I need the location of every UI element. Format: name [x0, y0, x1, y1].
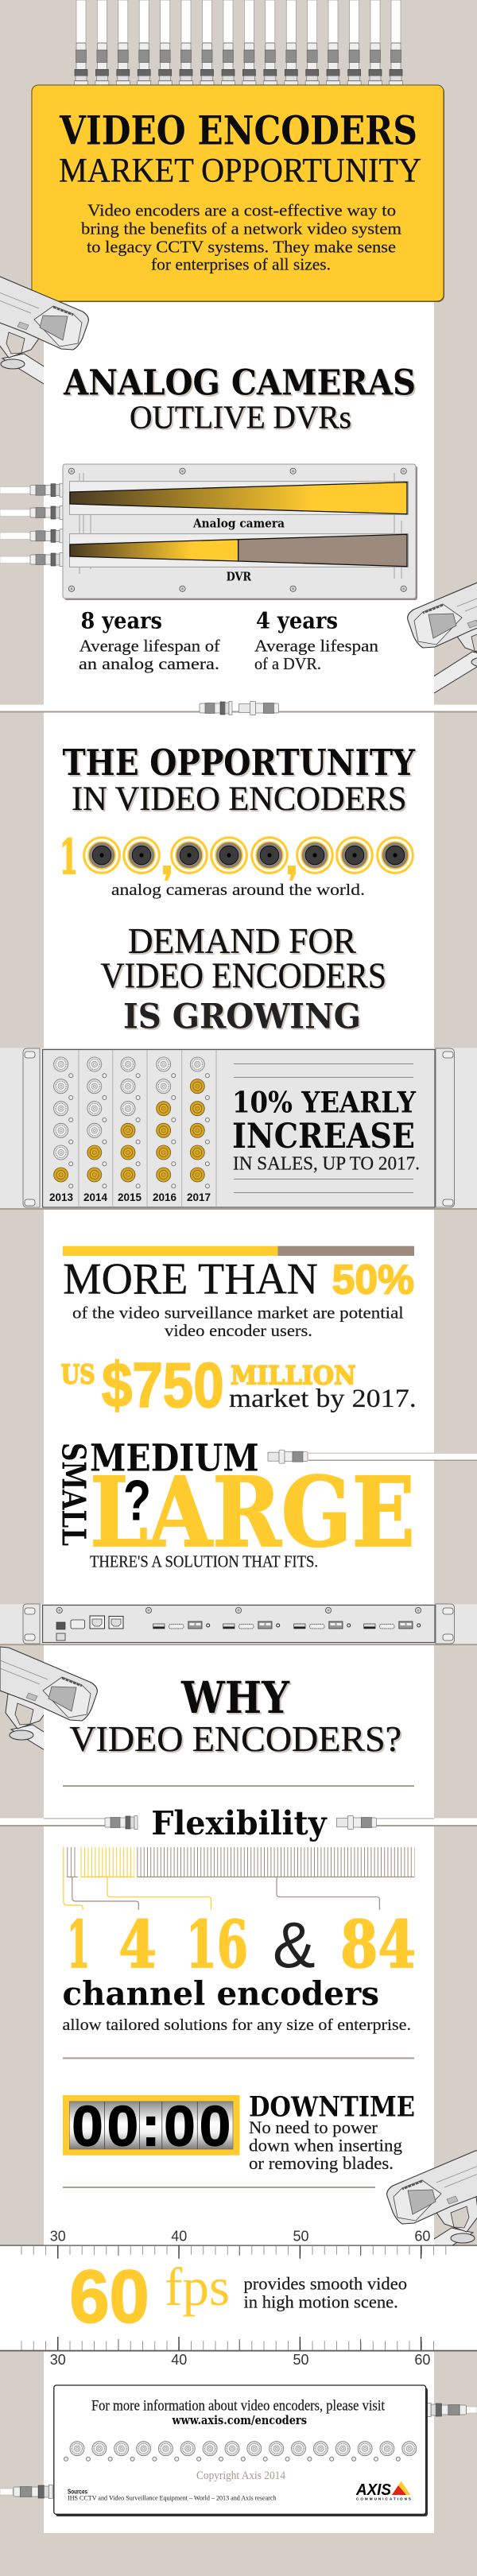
- sources: Sources: [68, 2488, 87, 2496]
- numbers: channel counts: 4: [118, 1908, 157, 1983]
- stat: 8 years: 8 years: [81, 608, 162, 634]
- panel: title: [32, 85, 444, 302]
- cable joint divider: [0, 701, 477, 715]
- callout: yearly increase: [232, 1086, 420, 1175]
- column: 2015: [118, 1057, 142, 1203]
- text: potential users: [72, 1303, 404, 1340]
- numbers: channel counts: [67, 1908, 416, 1983]
- icon: camera top left: [0, 277, 89, 385]
- intro text: Video encoders are a cost-effective way to: [87, 201, 396, 220]
- title: VIDEO ENCODERS: [59, 107, 417, 154]
- panel: rack sales chart: [0, 1048, 477, 1210]
- callout: yearly increase: INCREASE: [232, 1117, 415, 1156]
- number: 100,000,000 with lens zeros: 1: [60, 830, 78, 885]
- text: smooth video: provides smooth video: [243, 2274, 407, 2294]
- text: downtime: or removing blades.: [249, 2153, 394, 2173]
- heading: demand for video encoders is growing: [100, 921, 386, 1036]
- stat: 4 years: Average lifespan: [254, 636, 379, 655]
- section: flexibility header with cable: [0, 1804, 477, 1842]
- stat: US $750 million: $750: [102, 1350, 224, 1420]
- heading: more than 50%: MORE THAN: [63, 1254, 318, 1303]
- callout: yearly increase: 10% YEARLY: [232, 1086, 417, 1119]
- cable: medium plug: [268, 1450, 477, 1463]
- chart band: DVR: [69, 534, 408, 567]
- text: small medium large: LARGE: [90, 1455, 415, 1569]
- heading: demand for video encoders is growing: DEMAND FOR: [128, 921, 356, 961]
- ruler labels top: 60: [414, 2228, 430, 2244]
- column: 2014: 2014: [83, 1191, 107, 1203]
- heading: flexibility: Flexibility: [151, 1804, 328, 1842]
- stat: US $750 million: market by 2017.: [229, 1385, 417, 1413]
- text: channel encoders: channel encoders: [62, 1975, 379, 2013]
- icon: camera right upper: [407, 582, 477, 694]
- ruler labels bottom: 60: [414, 2352, 430, 2368]
- subheading: outlive DVRs: OUTLIVE DVRs: [130, 399, 351, 436]
- progress bar: 50 percent: [63, 1246, 414, 1256]
- text: small medium large: MEDIUM: [90, 1437, 259, 1481]
- intro text: to legacy CCTV systems. They make sense: [87, 237, 396, 256]
- stat: 8 years: Average lifespan of: [80, 636, 220, 655]
- text: smooth video: [243, 2274, 407, 2311]
- numbers: channel counts: 16: [186, 1908, 248, 1983]
- sources: IHS CCTV and Video Surveillance Equipment – World – 2013 and Axis research: [68, 2493, 277, 2501]
- intro text: [81, 201, 401, 273]
- stat: 8 years: an analog camera.: [79, 654, 219, 673]
- stat: US $750 million: [61, 1350, 417, 1420]
- column: 2016: 2016: [153, 1191, 176, 1203]
- stat: 8 years: [79, 608, 220, 673]
- timer: 00:00: 00:00: [72, 2095, 231, 2159]
- panel: footer: [54, 2385, 428, 2516]
- heading: more than 50%: 50%: [332, 1257, 414, 1303]
- stat: 60 fps: 60: [69, 2255, 149, 2338]
- ruler labels top: 30: [50, 2228, 66, 2244]
- text: smooth video: in high motion scene.: [243, 2291, 398, 2311]
- numbers: channel counts: 1: [67, 1908, 90, 1983]
- caption: analog cameras: analog cameras around the world.: [111, 881, 365, 899]
- callout: yearly increase: IN SALES, UP TO 2017.: [233, 1154, 420, 1175]
- column: 2017: [187, 1057, 211, 1203]
- icon: camera left middle: [0, 1647, 98, 1750]
- connectors: footer cables: [0, 2404, 477, 2499]
- text: tailored solutions: allow tailored solutions for any size of enterprise.: [62, 2016, 411, 2034]
- column: 2015: 2015: [118, 1191, 142, 1203]
- ruler labels top: 40: [171, 2228, 187, 2244]
- numbers: channel counts: &: [273, 1909, 316, 1981]
- ruler labels bottom: [50, 2352, 430, 2368]
- icon: camera right lower: [386, 2150, 477, 2245]
- stat: US $750 million: US: [61, 1359, 95, 1390]
- caption: solution that fits: THERE'S A SOLUTION THAT FITS.: [90, 1552, 318, 1571]
- ruler labels bottom: 30: [50, 2352, 66, 2368]
- heading: demand for video encoders is growing: IS GROWING: [123, 997, 361, 1036]
- text: potential users: video encoder users.: [165, 1321, 312, 1340]
- number: 100,000,000 with lens zeros: [60, 830, 413, 885]
- stat: 4 years: of a DVR.: [254, 654, 321, 673]
- text: downtime: DOWNTIME: [249, 2091, 415, 2124]
- column: 2013: [49, 1057, 73, 1203]
- text: small medium large: ?: [123, 1470, 151, 1533]
- connectors: DVR panel inputs: [0, 483, 63, 566]
- column: 2017: 2017: [187, 1191, 211, 1203]
- top coax cables: [75, 0, 402, 85]
- stat: US $750 million: MILLION: [231, 1361, 356, 1391]
- subtitle: MARKET OPPORTUNITY: [59, 153, 421, 190]
- logo: Axis Communications: [355, 2481, 411, 2500]
- diagram: channel comb: [64, 1847, 415, 1910]
- ruler: frame rate: [0, 2228, 477, 2368]
- heading: why: WHY: [180, 1671, 290, 1723]
- logo: Axis Communications: COMMUNICATIONS: [356, 2497, 411, 2500]
- text: downtime: down when inserting: [249, 2136, 402, 2156]
- label: DVR: DVR: [227, 571, 252, 584]
- intro text: bring the benefits of a network video system: [81, 219, 401, 238]
- stat: 4 years: [254, 608, 379, 673]
- stat: 4 years: 4 years: [256, 608, 338, 634]
- label: analog camera: Analog camera: [192, 517, 285, 530]
- ruler labels bottom: 50: [293, 2352, 309, 2368]
- white content column: [44, 298, 434, 2533]
- heading: the opportunity: THE OPPORTUNITY: [62, 742, 416, 784]
- connector faces row: [64, 2442, 417, 2461]
- intro text: for enterprises of all sizes.: [151, 254, 331, 273]
- text: downtime: No need to power: [249, 2117, 378, 2137]
- heading: analog cameras: ANALOG CAMERAS: [63, 363, 416, 404]
- numbers: channel counts: 84: [340, 1908, 416, 1983]
- link text: www.axis.com/encoders: [172, 2413, 307, 2427]
- text: small medium large: [54, 1437, 415, 1571]
- heading: demand for video encoders is growing: VIDEO ENCODERS: [100, 956, 386, 996]
- chart band: analog camera: [69, 482, 408, 514]
- text: small medium large: SMALL: [54, 1443, 92, 1546]
- stat: 60 fps: [69, 2255, 230, 2338]
- logo: Axis Communications: AXIS: [355, 2481, 392, 2499]
- sources: [68, 2488, 277, 2501]
- text: potential users: of the video surveillance market are potential: [72, 1303, 404, 1322]
- column: 2013: 2013: [49, 1191, 73, 1203]
- ruler labels top: 50: [293, 2228, 309, 2244]
- panel: encoder rack: [0, 1604, 477, 1645]
- subheading: video encoders?: VIDEO ENCODERS?: [69, 1718, 401, 1759]
- text: more information: For more information about video encoders, please visit: [91, 2398, 386, 2414]
- copyright: Copyright Axis 2014: [196, 2469, 285, 2482]
- subheading: in video encoders: IN VIDEO ENCODERS: [72, 781, 407, 818]
- column: 2014: [83, 1057, 107, 1203]
- text: downtime: [249, 2091, 415, 2173]
- panel: lifespan chart: [63, 464, 417, 600]
- stat: 60 fps: fps: [165, 2256, 230, 2317]
- ruler labels top: [50, 2228, 430, 2244]
- column: 2016: [153, 1057, 176, 1203]
- ruler labels bottom: 40: [171, 2352, 187, 2368]
